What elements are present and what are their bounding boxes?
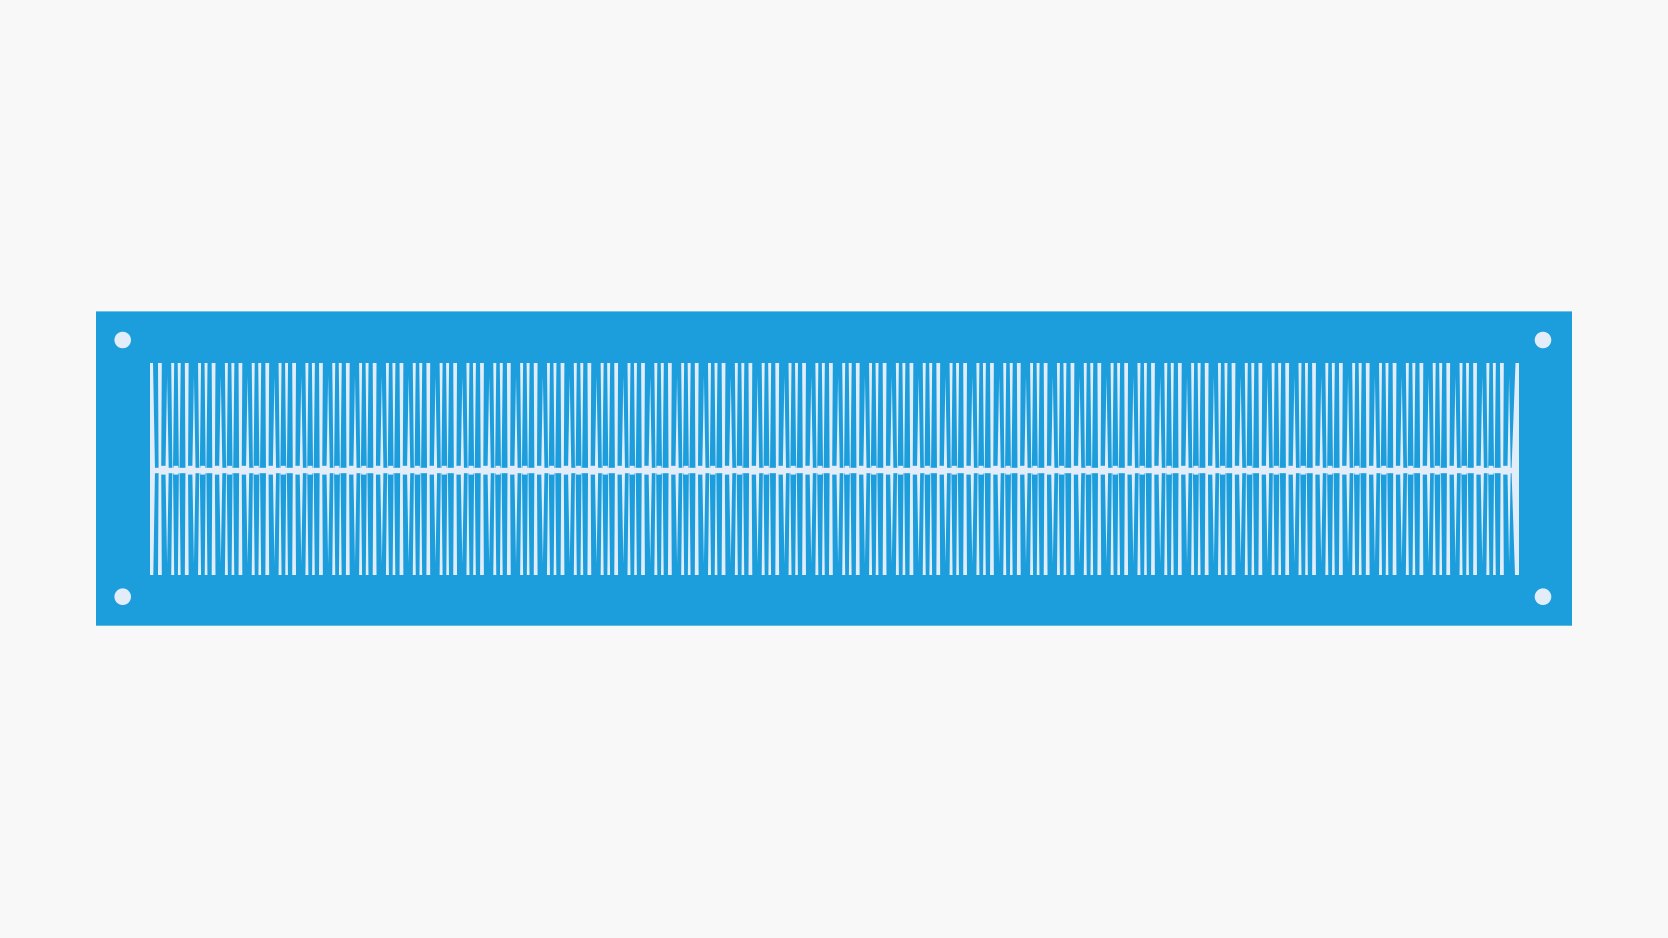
- repeating teeth: [158, 363, 1511, 575]
- central spine: [150, 468, 1519, 473]
- right end bar: [1512, 363, 1519, 575]
- comb chart: tapered teeth along a central spine: [150, 363, 1519, 575]
- left end bar: [150, 363, 155, 575]
- icon: bottom-right dot: [1535, 588, 1551, 605]
- icon: top-right dot: [1535, 332, 1551, 348]
- panel: blue background: [96, 311, 1572, 626]
- icon: bottom-left dot: [114, 588, 131, 605]
- icon: top-left dot: [114, 332, 131, 348]
